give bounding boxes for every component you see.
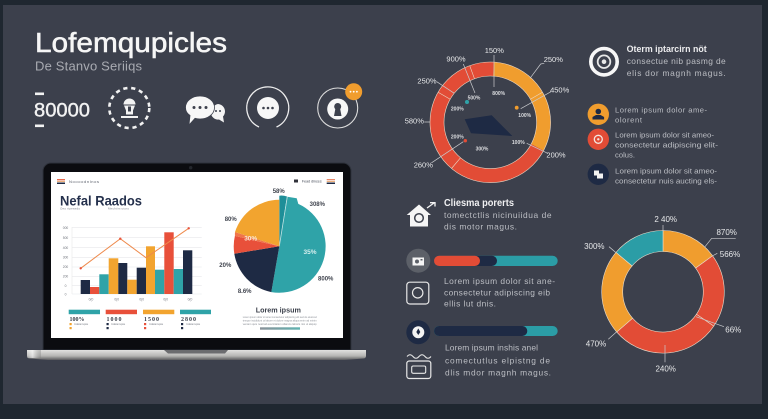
donut labels [584,215,741,374]
ring labels: 580% [405,116,424,126]
camera [189,166,192,169]
legend row: Coloran rupna [74,322,88,326]
pie chart: 80% [225,217,237,223]
pie chart: 30% [244,236,257,243]
text block: target: elis dor magnh magus. [627,68,726,78]
text block 2: ellis lut dnis. [444,299,496,309]
screen header left: Noooodnlnos [69,179,99,184]
ring labels: 200% [546,150,566,160]
ring labels: 200% [451,135,464,141]
stat number [34,92,90,127]
icon: circle with message dots [247,87,289,127]
pie chart: 8.6% [238,289,252,295]
icon: dashed circle with figure [109,88,149,128]
list item: red: colus. [615,151,635,160]
donut labels: 240% [655,365,676,374]
bar chart: 000 [63,226,68,230]
screen subtitle: Mechtim utoro [108,206,129,210]
pie chart: 20% [219,263,232,269]
text block: target [627,44,726,78]
screen subtitle: Oeo ripesedo [60,206,80,210]
text block: target: Oterm iptarcirn nöt [627,44,707,54]
list item: navy: consectetur nuis aucting els- [615,176,717,185]
icon: chat bubbles [186,96,225,125]
progress bar 2 [406,320,558,344]
bar chart: 0(0 [139,298,144,302]
list item: red [588,129,719,160]
ring labels: 100% [518,113,532,119]
pie caption: Lorem ipsum dolor sit amet consectetur adipiscing elit sed do eiusmod [243,315,317,319]
screen subtitle [60,206,129,210]
title: Lofemqupicles [35,27,227,58]
text block 3 [445,343,551,377]
bar chart [63,226,202,302]
ring labels: 200% [451,107,464,113]
icon: box with wave [407,355,431,378]
ring labels: 250% [417,77,437,86]
pie chart: 35% [303,249,317,256]
bar chart: 200 [63,274,68,278]
ring labels: 250% [544,55,563,64]
pie chart: 308% [310,202,326,208]
pie chart: 800% [318,276,334,282]
text block: climate [444,198,552,232]
icon: target [591,48,617,75]
screen header right: Fead dinces [302,178,322,184]
legend row: 100% [70,317,84,323]
donut leader lines [608,225,736,362]
list item: navy: Lorem ipsum dolor sit ameo- [615,166,717,175]
text block 3: dlis mdor magnh magus. [445,367,551,377]
ring labels: 300% [476,146,489,152]
laptop base [27,350,366,360]
donut labels: 2 40% [654,215,677,224]
text block 2: consectetur adipiscing eib [444,287,550,297]
text block: climate: tomectctlis nicinuiidua de [444,210,552,220]
bar chart: 400 [63,246,68,250]
icon: house with arrow [407,203,435,226]
ring centre shape [465,115,512,136]
pie caption [243,306,317,330]
pie caption: tempor incididunt ut labore et dolore magna aliqua enim ad minim [243,318,317,322]
donut labels: 470% [586,339,606,348]
icon: rounded square [407,282,429,304]
bar chart: 0 [65,284,67,288]
bar chart: 300 [63,256,68,260]
text block: climate: Cliesma porerts [444,198,515,209]
legend row: Coloran rupna [149,322,163,326]
pie chart: 58% [273,189,285,195]
text block 3: Lorem ipsum inshis anel [445,343,538,353]
donut labels: 300% [584,242,605,251]
list item: red: Lorem ipsum dolor sit ameo- [615,130,714,139]
legend row: Coloran rupna [186,322,200,326]
list item: navy [588,164,717,185]
text block 2: Lorem ipsum dolor sit ane- [444,276,555,286]
bar chart: 0 [65,292,67,296]
bottom donut chart [584,215,741,374]
pie chart [219,189,334,295]
icon: profile with orange badge [318,83,362,128]
ring labels: 500% [468,95,481,101]
laptop screen [51,172,343,338]
donut labels: 66% [725,326,741,335]
laptop [27,163,366,360]
stat number: 80000 [34,100,90,122]
ring labels: 900% [446,54,466,64]
legend row: 1000 [106,317,122,323]
ring labels [405,46,570,170]
list item: orange [588,104,707,125]
legend row: 2800 [181,317,196,323]
laptop lid [43,163,351,350]
ring labels: 260% [414,161,433,170]
bar chart: 0(0 [114,298,119,302]
bar chart: 500 [63,236,68,240]
list item: red: consectetur adipiscing elit- [615,140,719,149]
text block 3: comectutlus elpistng de [445,355,550,365]
legend row [69,310,211,329]
list item: orange: olorent [615,115,643,124]
text block: climate: dis motor magus. [444,222,517,232]
text block: target: consectue nib pasmg de [627,56,726,66]
top ring chart [405,46,570,183]
list item: orange: Lorem ipsum dolor ame- [615,105,707,114]
bar chart: 200 [63,265,68,269]
subtitle: De Stanvo Seriiqs [35,58,142,74]
ring labels: 450% [550,86,570,95]
legend row: 1500 [144,317,159,323]
donut labels: 566% [720,250,740,259]
bar chart: 0(0 [188,298,193,302]
pie caption: veniam quis nostrud exercitation ullamco laboris nisi ut aliquip [243,322,317,326]
bar chart: 0(0 [89,298,94,302]
legend row: Coloran rupna [111,322,125,326]
ring labels: 800% [492,91,506,97]
ring labels: 150% [485,46,504,55]
screen header right [294,178,335,184]
ring marker dots [464,100,519,142]
ring leader lines [424,55,551,163]
ring labels: 100% [512,140,525,146]
donut labels: 870% [716,228,737,237]
progress bar 1 [406,249,558,273]
pie caption: Lorem ipsum [256,306,301,314]
bar chart: 0(0 [163,298,168,302]
text block 2 [444,276,555,309]
screen title: Nefal Raados [60,193,142,209]
